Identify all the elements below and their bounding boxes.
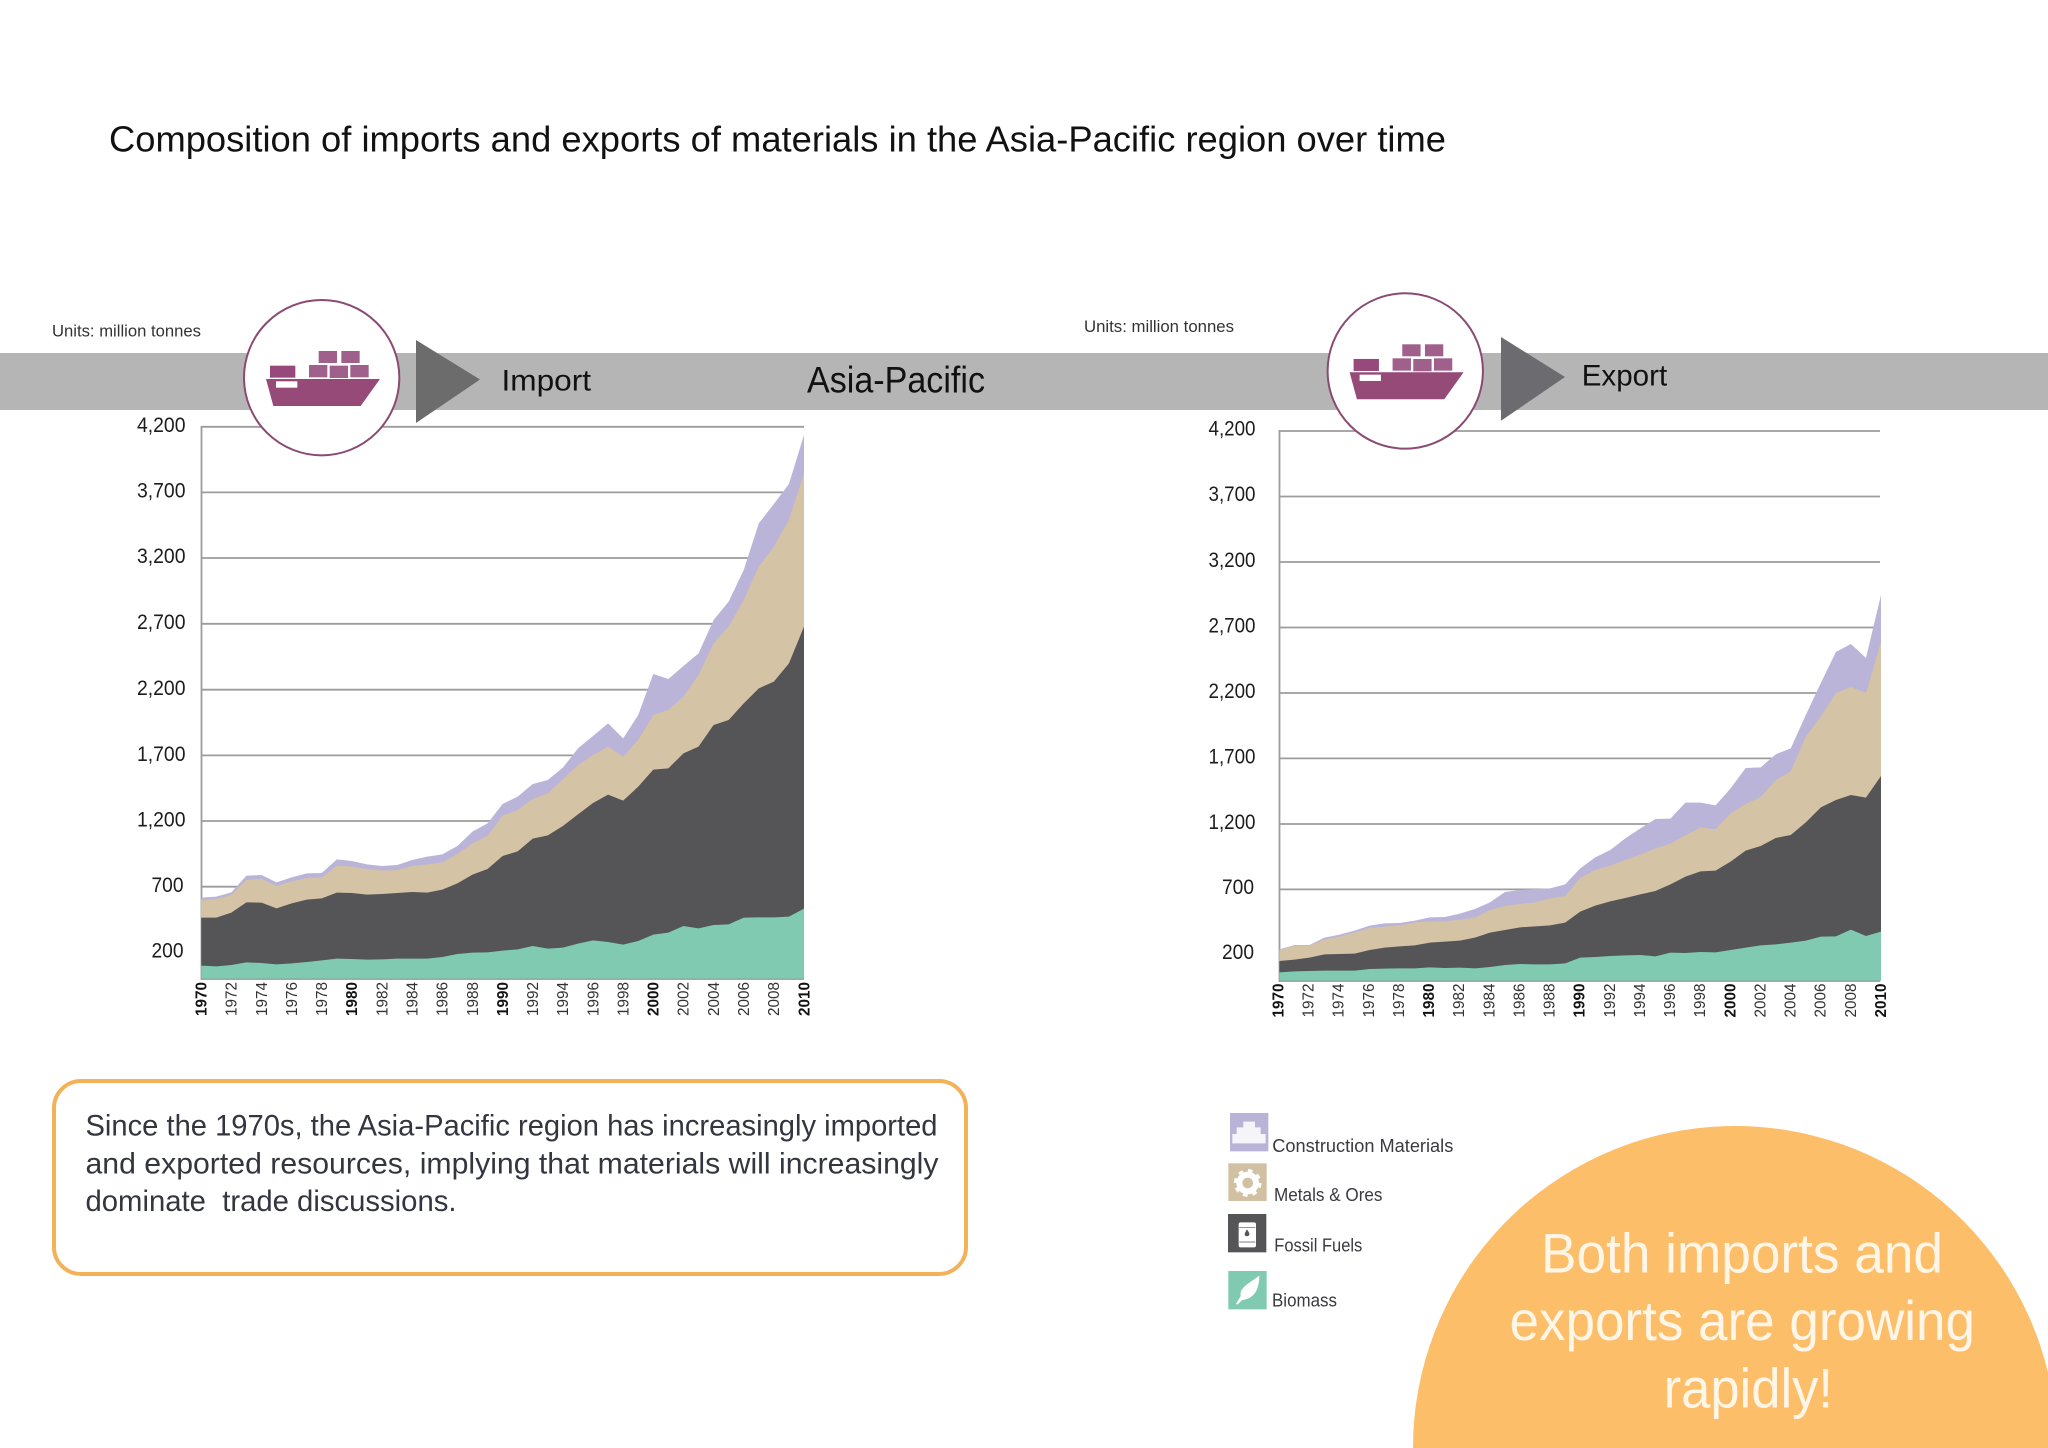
export y-axis labels: 1,200: [1208, 811, 1256, 834]
import x-axis year labels: 1988: [465, 982, 482, 1016]
icon: export ship: [1328, 293, 1483, 449]
biomass label: Biomass: [1272, 1289, 1337, 1310]
import y-axis labels: 3,700: [137, 480, 186, 503]
series: biomass: [1279, 930, 1881, 981]
import y-axis labels: 1,700: [137, 743, 186, 766]
export chart gridlines: [1279, 430, 1880, 982]
orange callout circle: exports are growing: [1510, 1289, 1975, 1352]
export x-axis year labels: [1270, 983, 1890, 1018]
orange callout circle: Both imports and: [1541, 1222, 1943, 1284]
series: fossil fuels: [1279, 776, 1881, 981]
export x-axis year labels: 1990: [1572, 983, 1589, 1018]
export y-axis labels: 3,700: [1208, 483, 1256, 506]
icon: biomass: [1228, 1271, 1267, 1309]
metals and ores label: Metals & Ores: [1274, 1184, 1382, 1205]
import x-axis year labels: 2004: [706, 982, 723, 1016]
fossil fuels label: Fossil Fuels: [1274, 1235, 1362, 1256]
title: Composition of imports and exports of materials in the Asia-Pacific region over time: [109, 118, 1446, 160]
import y-axis labels: 3,200: [137, 545, 186, 568]
import x-axis year labels: 1978: [314, 982, 331, 1016]
callout box: [54, 1081, 966, 1274]
import x-axis year labels: 2002: [676, 982, 693, 1016]
import x-axis year labels: 2008: [766, 982, 783, 1016]
export x-axis year labels: 2000: [1722, 983, 1739, 1018]
export x-axis year labels: 1970: [1270, 983, 1288, 1018]
series: construction materials: [1279, 595, 1881, 981]
import y-axis labels: [137, 414, 186, 963]
export x-axis year labels: 1986: [1512, 983, 1528, 1018]
construction materials label: Construction Materials: [1272, 1135, 1453, 1156]
export x-axis year labels: 1974: [1331, 983, 1348, 1018]
export units label: Units: million tonnes: [1084, 317, 1234, 336]
import x-axis year labels: 2006: [736, 982, 753, 1016]
export x-axis year labels: 1972: [1301, 983, 1318, 1018]
import x-axis year labels: 1982: [374, 982, 391, 1016]
import y-axis labels: 700: [152, 874, 184, 897]
callout box: Since the 1970s, the Asia-Pacific region has increasingly imported: [86, 1109, 938, 1142]
import x-axis year labels: 1996: [585, 982, 602, 1016]
export area chart: [1279, 595, 1881, 981]
import x-axis year labels: 1974: [254, 982, 271, 1016]
import x-axis year labels: 1994: [555, 982, 572, 1016]
grey header band: [0, 353, 2048, 410]
import x-axis year labels: 2010: [796, 982, 813, 1016]
export y-axis labels: 2,200: [1208, 680, 1256, 703]
export x-axis year labels: 1984: [1481, 983, 1498, 1018]
export x-axis year labels: 2010: [1873, 983, 1890, 1018]
import area chart: [201, 435, 804, 979]
import y-axis labels: 1,200: [137, 809, 186, 832]
export x-axis year labels: 2008: [1843, 983, 1860, 1018]
import y-axis labels: 200: [152, 940, 184, 963]
import x-axis year labels: 1970: [194, 982, 210, 1016]
export y-axis labels: [1208, 418, 1256, 964]
export x-axis year labels: 1976: [1361, 983, 1378, 1018]
orange callout circle: rapidly!: [1664, 1356, 1833, 1420]
icon: construction materials: [1230, 1113, 1268, 1151]
import x-axis year labels: 1980: [344, 982, 361, 1016]
export y-axis labels: 1,700: [1208, 746, 1256, 769]
import y-axis labels: 2,200: [137, 677, 186, 700]
export x-axis year labels: 2006: [1813, 983, 1830, 1018]
export x-axis year labels: 1998: [1692, 983, 1709, 1018]
export x-axis year labels: 2002: [1752, 983, 1769, 1018]
export x-axis year labels: 1994: [1632, 983, 1649, 1018]
import x-axis year labels: [194, 982, 813, 1016]
import x-axis year labels: 1984: [404, 982, 422, 1016]
export x-axis year labels: 1982: [1451, 983, 1468, 1018]
export x-axis year labels: 1980: [1421, 983, 1438, 1018]
series: metals and ores: [201, 473, 804, 979]
export y-axis labels: 2,700: [1208, 614, 1256, 638]
export y-axis labels: 4,200: [1208, 418, 1256, 441]
export label: Export: [1582, 359, 1668, 392]
import x-axis year labels: 1986: [435, 982, 452, 1016]
icon: import ship: [244, 300, 399, 455]
arrow: export: [1501, 337, 1565, 421]
legend: [1228, 1113, 1453, 1310]
import y-axis labels: 4,200: [137, 414, 186, 437]
import units label: Units: million tonnes: [52, 322, 201, 341]
export x-axis year labels: 1992: [1602, 983, 1619, 1018]
orange callout circle: [1413, 1126, 2048, 1448]
export y-axis labels: 3,200: [1208, 549, 1256, 572]
import x-axis year labels: 2000: [646, 982, 663, 1016]
export y-axis labels: 700: [1222, 876, 1254, 899]
import x-axis year labels: 1976: [284, 982, 301, 1016]
callout box: dominate trade discussions.: [86, 1185, 456, 1218]
arrow: import: [416, 340, 480, 423]
series: biomass: [201, 909, 804, 979]
callout box: and exported resources, implying that materials will increasingly: [86, 1147, 938, 1180]
asia-pacific label: Asia-Pacific: [807, 360, 985, 401]
series: construction materials: [201, 435, 804, 979]
export x-axis year labels: 1988: [1542, 983, 1559, 1018]
export x-axis year labels: 1996: [1662, 983, 1679, 1018]
import x-axis year labels: 1992: [525, 982, 542, 1016]
import label: Import: [502, 365, 592, 398]
series: fossil fuels: [201, 627, 804, 979]
import chart gridlines: [201, 426, 804, 980]
import x-axis year labels: 1990: [495, 982, 512, 1016]
export x-axis year labels: 2004: [1782, 983, 1800, 1018]
export y-axis labels: 200: [1222, 941, 1254, 964]
icon: metals and ores: [1228, 1163, 1267, 1201]
import y-axis labels: 2,700: [137, 611, 186, 634]
import x-axis year labels: 1998: [616, 982, 632, 1016]
import x-axis year labels: 1972: [224, 982, 241, 1016]
series: metals and ores: [1279, 642, 1881, 981]
export x-axis year labels: 1978: [1391, 983, 1408, 1018]
icon: fossil fuels: [1228, 1214, 1266, 1252]
